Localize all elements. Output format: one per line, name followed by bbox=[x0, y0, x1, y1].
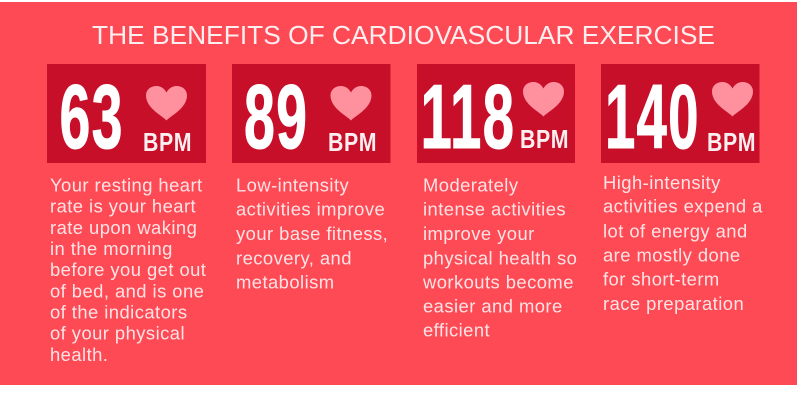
panel: 89 BPM low intensity bbox=[232, 64, 394, 292]
description: resting heart rate: of bed, and is one bbox=[50, 280, 204, 301]
panel: 63 BPM resting bbox=[47, 64, 212, 365]
description: resting heart rate: Your resting heart bbox=[50, 175, 203, 196]
description: high-intensity: for short-term bbox=[603, 269, 720, 290]
description: moderately intense: efficient bbox=[423, 320, 490, 341]
description: low-intensity: Low-intensity bbox=[236, 175, 350, 196]
description: moderately intense: Moderately bbox=[423, 175, 519, 196]
stat box: 140 BPM bbox=[601, 64, 760, 167]
stat box: 118 BPM bbox=[417, 64, 575, 168]
stat box: 89 BPM: BPM bbox=[328, 128, 377, 158]
stat box: 140 BPM: 140 bbox=[605, 66, 700, 167]
description: moderately intense: improve your bbox=[423, 223, 535, 244]
stat box: 89 BPM bbox=[232, 64, 390, 167]
description: resting heart rate: rate is your heart bbox=[50, 196, 196, 217]
description: low-intensity: recovery, and bbox=[236, 247, 352, 268]
description: low-intensity: activities improve bbox=[236, 199, 385, 220]
stat box: 63 BPM: BPM bbox=[143, 128, 192, 158]
title: THE BENEFITS OF CARDIOVASCULAR EXERCISE bbox=[92, 20, 715, 50]
description: moderately intense: easier and more bbox=[423, 296, 563, 317]
description: moderately intense: physical health so bbox=[423, 247, 577, 268]
description: moderately intense: intense activities bbox=[423, 199, 566, 220]
stat box: 63 BPM bbox=[47, 64, 206, 167]
description: high-intensity: High-intensity bbox=[603, 172, 721, 193]
description: low-intensity: metabolism bbox=[236, 271, 335, 292]
panel: 140 BPM high intensity bbox=[601, 64, 768, 314]
description: resting heart rate: of your physical bbox=[50, 322, 185, 344]
panel: 118 BPM moderate bbox=[417, 64, 583, 341]
stat box: 89 BPM: 89 bbox=[244, 66, 308, 167]
stat box: 63 BPM: 63 bbox=[60, 66, 124, 167]
description: resting heart rate: rate upon waking bbox=[50, 217, 197, 238]
description: resting heart rate: before you get out bbox=[50, 259, 206, 280]
stat box: 118 BPM: BPM bbox=[520, 125, 569, 155]
description: high-intensity: lot of energy and bbox=[603, 220, 748, 241]
description: high-intensity: are mostly done bbox=[603, 244, 741, 265]
description: moderately intense: workouts become bbox=[422, 271, 574, 292]
stat box: 140 BPM: BPM bbox=[707, 128, 756, 158]
description: low-intensity: your base fitness, bbox=[236, 223, 388, 244]
description: resting heart rate: of the indicators bbox=[50, 301, 187, 322]
description: high-intensity: race preparation bbox=[603, 293, 744, 314]
description: high-intensity: activities expend a bbox=[603, 196, 763, 217]
description: resting heart rate: health. bbox=[50, 344, 108, 365]
stat box: 118 BPM: 118 bbox=[420, 66, 515, 168]
description: resting heart rate: in the morning bbox=[50, 238, 173, 259]
